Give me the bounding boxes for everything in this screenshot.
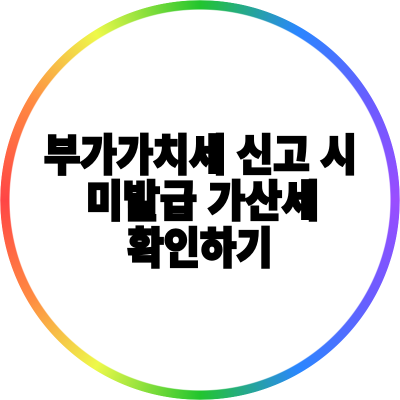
title: 부가가치세 신고 시 xyxy=(44,132,357,180)
title: 확인하기 xyxy=(128,226,272,274)
title: 미발급 가산세 xyxy=(86,178,319,226)
